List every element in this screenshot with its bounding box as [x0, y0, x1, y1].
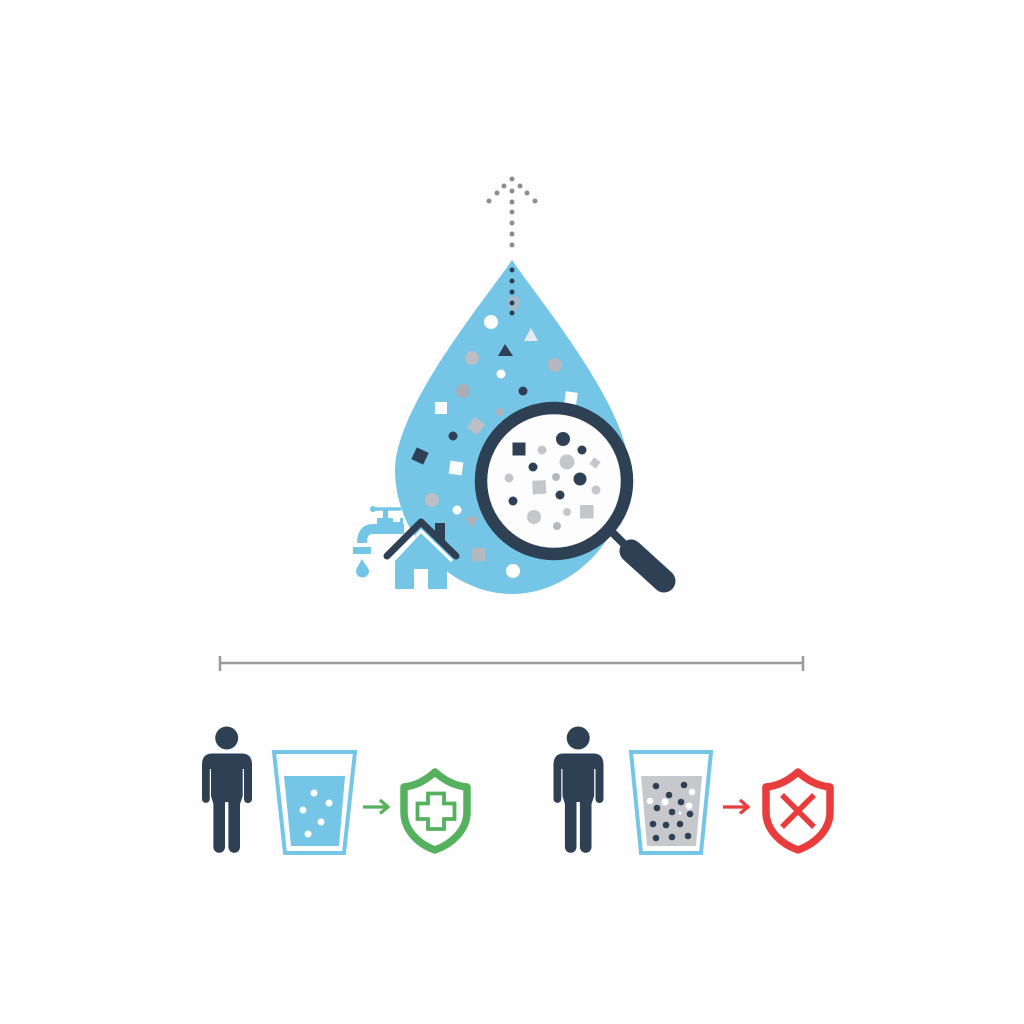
- panel: contaminated water outcome: [554, 726, 830, 853]
- dotted upward arrow: [486, 176, 538, 316]
- magnified particles: [504, 432, 601, 530]
- icon: faucet: [353, 506, 404, 578]
- drop shape: [395, 260, 629, 594]
- icon: person: [202, 726, 252, 853]
- lens: [481, 408, 627, 554]
- water drop with particles: [395, 260, 629, 594]
- magnifying glass: [481, 408, 664, 581]
- icon: person: [554, 726, 604, 853]
- arrow: red: [723, 800, 748, 814]
- icon: glass of contaminated water: [631, 752, 711, 853]
- icon: house: [387, 522, 456, 589]
- arrow: green: [363, 800, 388, 814]
- icon: red shield with x: [766, 772, 830, 850]
- handle: [612, 532, 664, 581]
- icon: green shield with cross: [404, 772, 467, 850]
- bracket divider: [220, 656, 803, 671]
- particles in water: [411, 296, 578, 578]
- icon: glass of clean water: [274, 752, 355, 853]
- panel: clean water outcome: [202, 726, 467, 853]
